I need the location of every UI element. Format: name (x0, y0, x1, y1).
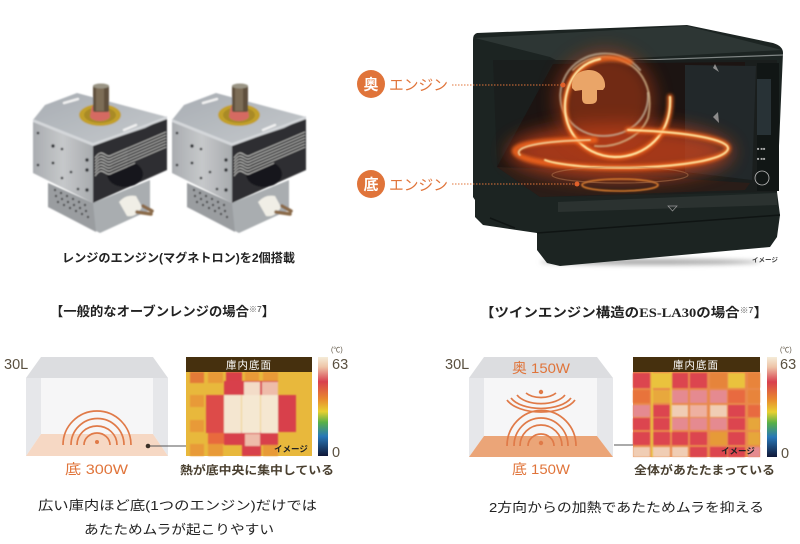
oven front band (558, 193, 777, 212)
icon: microwave arcs (63, 411, 131, 445)
heat map: twin engine (633, 357, 760, 457)
text: ordinary oven conclusion: あたためムラが起こりやすい (84, 522, 274, 537)
icon: back arcs (507, 390, 575, 412)
temperature scale: twin engine: (℃) (780, 346, 792, 354)
magnetron photos (33, 84, 306, 233)
text: ordinary oven conclusion (38, 498, 317, 537)
orange glow (508, 124, 732, 180)
back wattage label: 奥 150W (512, 360, 571, 376)
capacity label: 30L (4, 357, 28, 373)
lower drawer line (490, 215, 780, 233)
heat map caption: 全体があたたまっている (634, 463, 775, 477)
text: twin engine conclusion: 2方向からの加熱であたためムラを抑える (489, 500, 764, 515)
temperature scale: twin engine (767, 346, 796, 462)
heading: ordinary oven: 】 (262, 304, 275, 319)
image note: イメージ (274, 444, 308, 454)
heat map header (633, 357, 760, 372)
control panel: ■ ■■ (757, 146, 766, 151)
image note: イメージ (752, 256, 778, 264)
text: ordinary oven conclusion: 広い庫内ほど底(1つのエンジン)だけでは (38, 498, 317, 513)
temperature scale: ordinary oven: 63 (332, 357, 348, 373)
oven interior (493, 60, 777, 197)
oven body (473, 25, 783, 266)
heading: twin engine: ※7 (740, 306, 754, 315)
icon: mushroom target (572, 70, 605, 104)
oven top face (475, 26, 782, 62)
connector (146, 444, 187, 448)
cavity box (26, 357, 168, 456)
temperature scale: ordinary oven: 0 (332, 445, 340, 461)
heat map: ordinary oven (186, 357, 312, 456)
heat map caption: 熱が底中央に集中している (180, 463, 334, 477)
heading: ordinary oven: ※7 (249, 305, 262, 314)
temperature scale: twin engine: 0 (781, 446, 789, 462)
icon: bottom arcs (507, 410, 576, 446)
oven shadow (540, 259, 760, 265)
heat map: ordinary oven: 庫内底面 (226, 358, 272, 372)
temperature scale: ordinary oven: (℃) (331, 346, 343, 354)
heat map header (186, 357, 312, 372)
control panel (755, 63, 779, 191)
panel: ordinary oven diagram (4, 357, 187, 477)
label: back engine: エンジン (389, 77, 448, 94)
label: back engine (357, 70, 566, 98)
magnetron caption: レンジのエンジン(マグネトロン)を2個搭載 (62, 250, 295, 265)
temperature scale: twin engine: 63 (780, 357, 796, 373)
image note: イメージ (721, 446, 755, 456)
wattage label: 底 150W (512, 461, 571, 477)
microwave oven with twin engine glow (473, 25, 783, 266)
cavity box (469, 357, 613, 457)
heading: twin engine: 】 (754, 305, 768, 320)
control panel: ■ ■■ (757, 156, 766, 161)
label: bottom engine: 底 (363, 176, 379, 194)
icon: magnetron right (172, 84, 306, 233)
side window and door detail (685, 65, 756, 180)
panel: twin engine diagram (445, 357, 634, 477)
heating spirals (515, 54, 728, 191)
heading: ordinary oven: 【一般的なオーブンレンジの場合 (50, 304, 244, 319)
heat map: twin engine: 庫内底面 (673, 358, 719, 372)
wattage label: 底 300W (65, 461, 129, 477)
icon: magnetron left (33, 84, 167, 233)
heading: twin engine: 【ツインエンジン構造の ES-LA30 の場合 (480, 305, 735, 320)
label: bottom engine (357, 170, 580, 198)
temperature scale: ordinary oven (318, 346, 348, 461)
oven brand mark (668, 206, 677, 211)
label: back engine: 奥 (363, 76, 379, 94)
capacity label: 30L (445, 357, 469, 373)
label: bottom engine: エンジン (389, 177, 448, 194)
connector (614, 444, 634, 446)
